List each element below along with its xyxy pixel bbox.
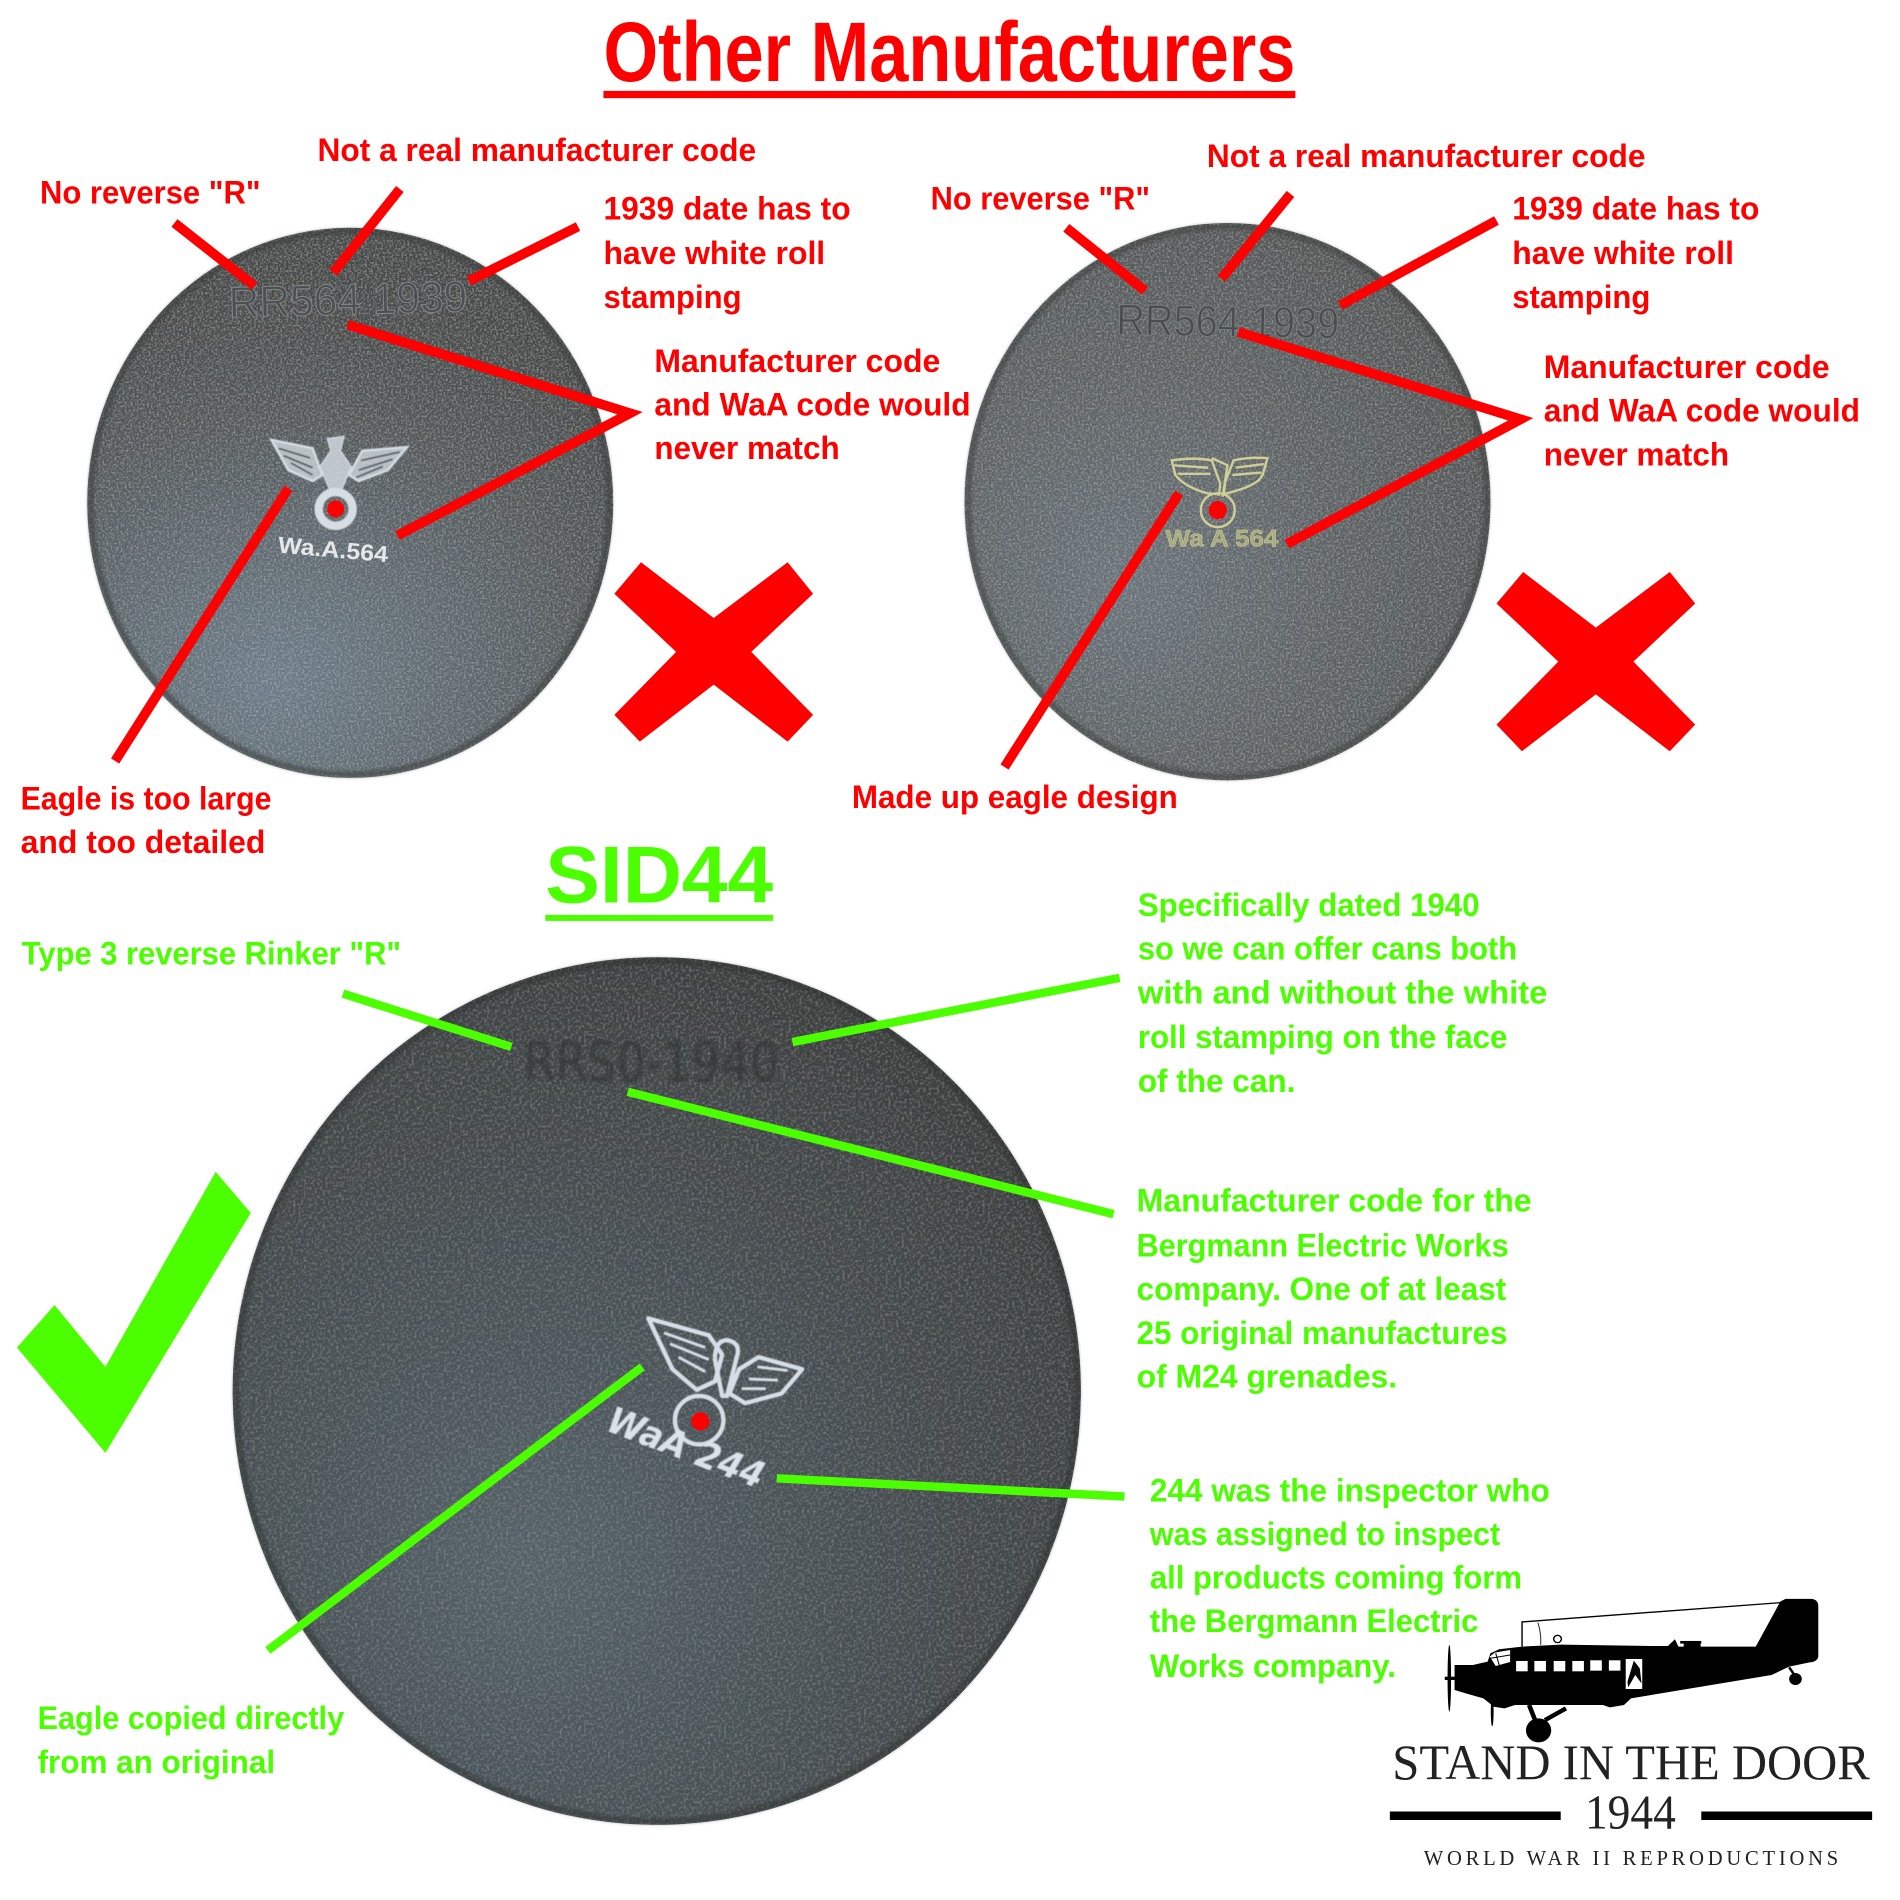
callout lines: [1005, 194, 1521, 767]
annotations: 244 was the inspector who: [1150, 1471, 1550, 1508]
annotations: [22, 886, 1550, 1780]
annotations: Not a real manufacturer code: [1207, 137, 1646, 174]
WaA text: WaA 244: [601, 1398, 771, 1497]
logo name: STAND IN THE DOOR: [1392, 1735, 1871, 1790]
annotations: stamping: [603, 278, 742, 315]
eagle stamp: [271, 436, 407, 526]
annotations: 25 original manufactures: [1137, 1314, 1507, 1351]
title: Other Manufacturers: [603, 4, 1295, 99]
annotations: of M24 grenades.: [1137, 1357, 1397, 1394]
red dot: [691, 1412, 709, 1430]
annotations: never match: [654, 429, 840, 466]
annotations: have white roll: [603, 234, 825, 271]
photo: SID44 can lid: [233, 957, 1081, 1825]
WaA text: Wa A 564: [1166, 525, 1279, 552]
logo bars: [1390, 1812, 1872, 1820]
annotations: Eagle is too large: [21, 779, 271, 816]
annotations: Specifically dated 1940: [1138, 886, 1480, 923]
red dot: [327, 500, 344, 517]
annotations: Manufacturer code: [654, 342, 940, 379]
panel: SID44 can: [17, 886, 1550, 1825]
annotations: Manufacturer code: [1544, 348, 1830, 385]
annotations: have white roll: [1512, 234, 1734, 271]
annotations: roll stamping on the face: [1138, 1018, 1507, 1055]
annotations: from an original: [38, 1743, 275, 1780]
eagle stamp: [648, 1318, 802, 1444]
annotations: never match: [1544, 435, 1729, 472]
logo tagline: WORLD WAR II REPRODUCTIONS: [1424, 1848, 1838, 1870]
annotations: [852, 137, 1860, 815]
annotations: Bergmann Electric Works: [1137, 1227, 1509, 1264]
eagle outline stamp: [1172, 458, 1267, 527]
annotations: Eagle copied directly: [38, 1699, 345, 1736]
annotations: Type 3 reverse Rinker "R": [22, 935, 401, 972]
annotations: 1939 date has to: [1512, 189, 1759, 226]
annotations: and too detailed: [21, 823, 265, 860]
logo year: 1944: [1585, 1787, 1676, 1840]
annotations: and WaA code would: [1544, 392, 1860, 429]
check mark: [17, 1172, 251, 1453]
cross mark: [614, 562, 813, 742]
cross mark: [1496, 572, 1695, 751]
panel: first fake can: [21, 131, 971, 860]
logo: Stand in the Door 1944: [1390, 1599, 1872, 1870]
stamped code: RR564 1939: [1116, 296, 1340, 348]
annotations: No reverse "R": [40, 174, 261, 211]
red dot: [1209, 501, 1227, 519]
panel: second fake can: [852, 137, 1860, 815]
annotations: was assigned to inspect: [1149, 1515, 1500, 1552]
stamped code: RR564 1939: [228, 273, 468, 327]
icon: transport plane silhouette: [1445, 1599, 1818, 1742]
callout lines: [115, 189, 630, 761]
annotations: with and without the white: [1137, 973, 1547, 1010]
WaA text: Wa.A.564: [277, 532, 389, 567]
annotations: Made up eagle design: [852, 778, 1178, 815]
photo: first can lid: [87, 228, 613, 778]
annotations: stamping: [1512, 278, 1650, 315]
annotations: No reverse "R": [931, 180, 1150, 217]
stamped code: RRS0-1940: [523, 1030, 779, 1094]
callout lines: [268, 978, 1124, 1650]
photo: second can lid: [965, 223, 1490, 780]
annotations: the Bergmann Electric: [1150, 1602, 1478, 1639]
annotations: 1939 date has to: [603, 189, 851, 226]
annotations: Manufacturer code for the: [1137, 1182, 1532, 1219]
annotations: Works company.: [1150, 1647, 1396, 1684]
annotations: and WaA code would: [654, 386, 971, 423]
annotations: company. One of at least: [1137, 1270, 1506, 1307]
heading: SID44: SID44: [545, 831, 773, 921]
annotations: [21, 131, 971, 860]
annotations: of the can.: [1138, 1062, 1295, 1099]
annotations: so we can offer cans both: [1138, 930, 1517, 967]
annotations: Not a real manufacturer code: [317, 131, 756, 168]
annotations: all products coming form: [1150, 1559, 1522, 1596]
